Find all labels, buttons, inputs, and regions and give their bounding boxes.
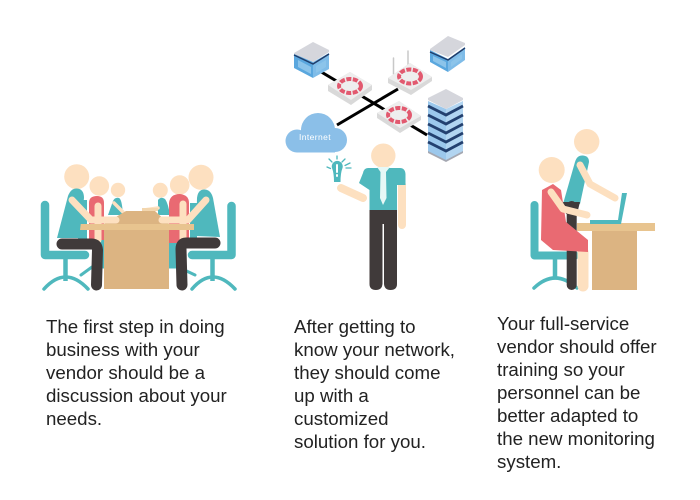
illustration: network diagram	[286, 36, 465, 162]
person: back left small	[108, 183, 125, 215]
desk	[577, 223, 655, 290]
text: step two: know your network,	[294, 339, 455, 360]
text: step one: business with your	[46, 339, 200, 360]
person: back right small	[144, 183, 170, 215]
building: top left	[294, 42, 329, 78]
text: step two: up with a	[294, 385, 369, 406]
text: step three: the new monitoring	[497, 428, 655, 449]
network cables	[318, 70, 427, 135]
icon: laptop	[590, 193, 627, 224]
illustration: team meeting at table	[44, 164, 235, 289]
text: step one: vendor should be a	[46, 362, 205, 383]
text: step two: solution for you.	[294, 431, 426, 452]
chair	[534, 205, 577, 288]
left chair	[44, 205, 88, 289]
text: step one: The first step in doing	[46, 316, 225, 337]
firewall device 2 with antennas	[388, 51, 432, 95]
text: step three: better adapted to	[497, 405, 638, 426]
text: step two: they should come	[294, 362, 440, 383]
text: step one: discussion about your	[46, 385, 227, 406]
table	[79, 208, 194, 289]
text: step three: training so your	[497, 359, 625, 380]
text: step three: system.	[497, 451, 561, 472]
trousers	[370, 210, 397, 290]
text: step one: needs.	[46, 408, 102, 429]
seated person	[539, 157, 588, 286]
text: step three	[497, 313, 657, 472]
text: step two: customized	[294, 408, 389, 429]
right chair	[192, 206, 235, 289]
person: right middle in red	[169, 175, 190, 243]
text: step three: personnel can be	[497, 382, 640, 403]
firewall device 1	[328, 72, 372, 105]
text: step two: After getting to	[294, 316, 416, 337]
internet cloud	[286, 113, 347, 152]
arms	[341, 185, 402, 225]
tower building	[428, 89, 463, 162]
firewall device 3	[377, 101, 421, 133]
back chairs	[81, 267, 195, 275]
person: left middle in red	[89, 176, 109, 240]
person: left front	[57, 164, 116, 285]
internet cloud: Internet	[299, 132, 331, 142]
person: right front	[162, 165, 220, 285]
text: step one	[46, 316, 227, 429]
icon: lightbulb	[327, 156, 351, 182]
back chair bodies	[78, 200, 197, 267]
text: step three: Your full-service	[497, 313, 629, 334]
building: top right	[430, 36, 465, 72]
head	[371, 144, 395, 168]
illustration: man with idea	[327, 144, 406, 290]
text: step two	[294, 316, 455, 452]
text: step three: vendor should offer	[497, 336, 657, 357]
standing person	[563, 129, 615, 285]
tie and collar	[377, 167, 390, 205]
illustration: training at desk	[534, 129, 655, 290]
shirt	[359, 168, 406, 210]
